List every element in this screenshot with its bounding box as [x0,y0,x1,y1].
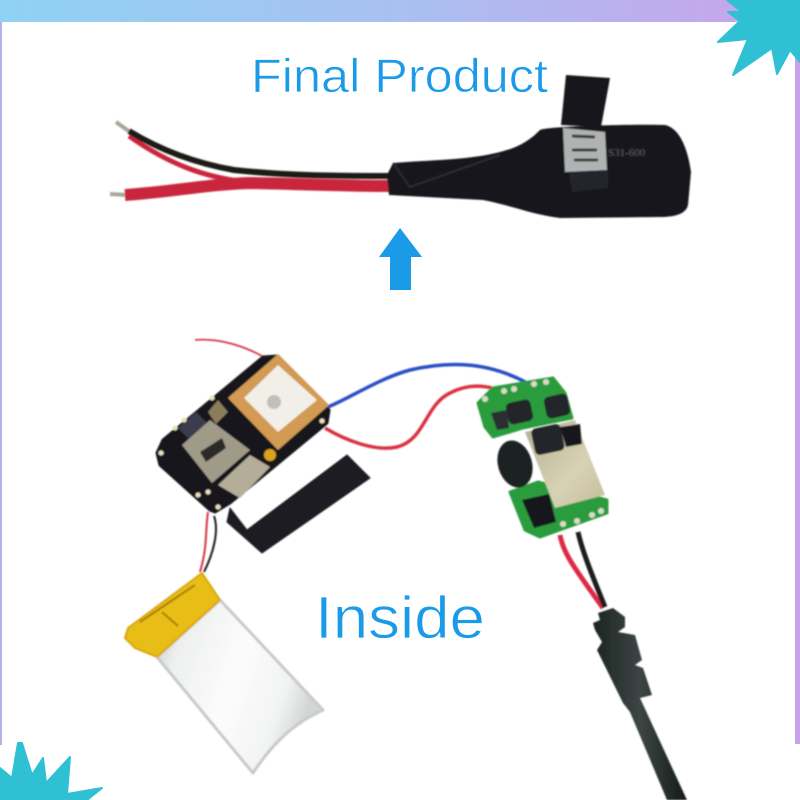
sim holder slots [572,136,598,160]
sim holder [563,128,607,172]
black square ic [522,494,556,528]
wire tips [110,122,130,195]
red wire lower [125,183,392,195]
green board bottom [510,482,607,537]
inductor 1 [505,399,534,425]
gps patch top [244,365,317,432]
capacitor [492,436,538,492]
battery yellow tape [125,573,220,657]
microsd slot [218,455,270,498]
black wire [129,131,392,176]
photo: final product device [110,75,691,218]
flexible antenna [227,455,370,553]
blue wire [328,364,527,407]
dc connector and cable [593,608,687,800]
board chip near gps [208,400,228,424]
sim contacts [200,438,226,462]
battery red lead [200,512,208,572]
thin red antenna wire [195,340,262,356]
red wire [325,386,492,448]
gps feed [267,395,281,409]
board pads [485,382,601,524]
inductor 3 [530,423,565,456]
frame: right band [795,22,800,744]
tape fold highlight [393,155,500,187]
molded black body [387,125,691,218]
photo: inside components [125,340,687,800]
printed code on body: S31-600 [608,147,646,159]
tape shadow fold [140,585,195,626]
decoration: teal star bottom left [0,743,102,800]
output black lead [578,532,605,607]
heading: Final Product: Final Product [251,49,548,102]
antenna flap [561,75,610,127]
dark socket [178,412,208,440]
metal shield [525,420,605,508]
red wire under black [129,136,245,182]
gps patch ceramic [230,356,327,448]
decoration: teal star top right [718,0,800,75]
chip [560,424,582,447]
output red lead [560,535,603,608]
black lead [204,516,216,572]
battery cell [157,600,323,773]
green board top [478,378,572,437]
gold pads [264,449,276,461]
sim slot [182,420,250,483]
tracker board [157,356,329,512]
frame: left band [0,22,2,745]
tab below sim [569,170,608,192]
inductor 2 [543,393,571,419]
frame: top gradient band [0,0,800,22]
small holes [161,398,322,507]
heading: Inside: Inside [315,585,485,651]
small chip [491,410,509,430]
arrow: up [379,228,422,290]
